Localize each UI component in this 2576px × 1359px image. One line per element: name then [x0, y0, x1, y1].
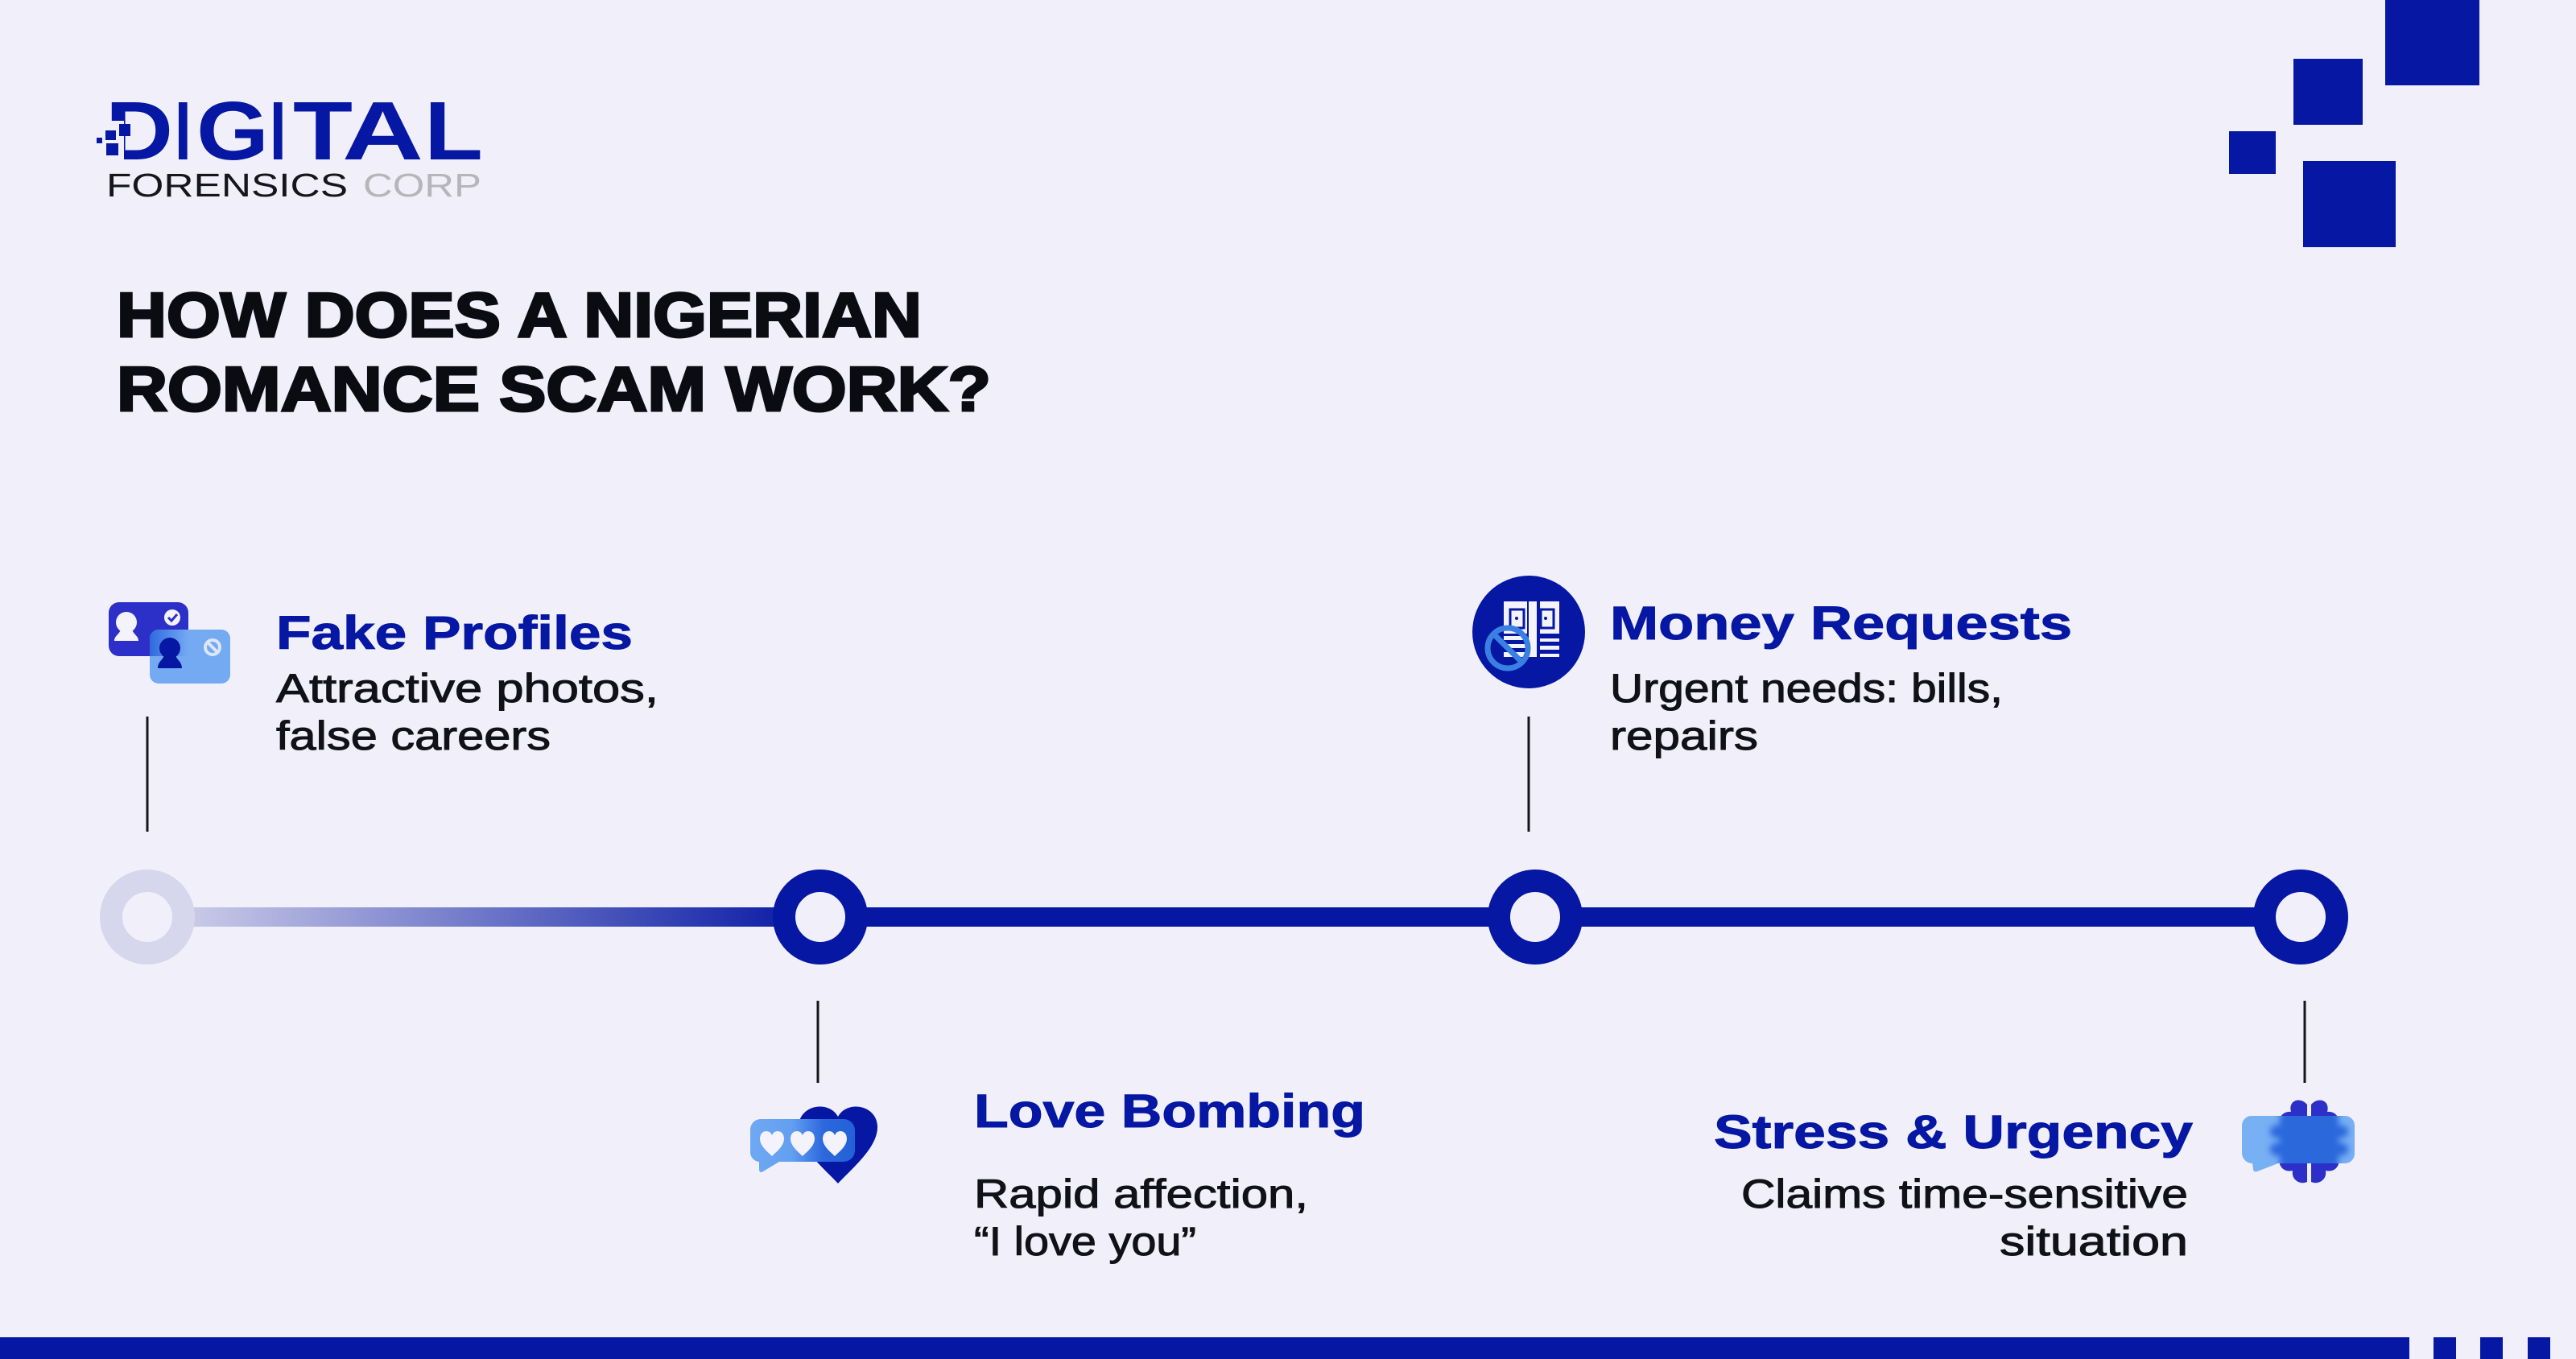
bottom bar — [0, 1337, 2550, 1359]
logo: Digital Forensics Corp — [97, 85, 483, 204]
step: Stress & Urgency — [1714, 1100, 2355, 1264]
logo: Digital Forensics Corp: L — [424, 85, 483, 177]
icon: heart and chat bubble — [750, 1106, 877, 1183]
heading: Stress & Urgency — [1714, 1106, 2193, 1159]
timeline node 1 — [111, 881, 184, 953]
description — [974, 1171, 1308, 1264]
title: ROMANCE SCAM WORK? — [117, 353, 991, 424]
heading: Love Bombing — [974, 1085, 1365, 1138]
logo: Digital Forensics Corp: I — [270, 85, 287, 178]
description: “I love you” — [974, 1219, 1196, 1264]
description — [276, 666, 658, 758]
description — [1741, 1171, 2188, 1264]
step: Fake Profiles — [109, 602, 658, 758]
logo: Digital Forensics Corp: FORENSICS — [106, 167, 348, 204]
logo: Digital Forensics Corp: I — [175, 85, 192, 178]
step: Money Requests — [1472, 576, 2072, 758]
decorative squares top right — [2229, 0, 2479, 247]
heading: Fake Profiles — [276, 607, 633, 659]
heading: Money Requests — [1610, 597, 2072, 650]
timeline — [111, 881, 2337, 953]
title — [117, 279, 991, 424]
step: Love Bombing — [750, 1085, 1365, 1264]
logo: Digital Forensics Corp: A — [342, 85, 423, 177]
description — [1610, 666, 2003, 758]
title: HOW DOES A NIGERIAN — [117, 279, 922, 350]
description: Rapid affection, — [974, 1171, 1308, 1216]
description: situation — [2000, 1219, 2188, 1264]
timeline node 2 — [784, 881, 857, 953]
logo: Digital Forensics Corp: CORP — [363, 167, 481, 204]
logo: Digital Forensics Corp: G — [196, 85, 269, 177]
icon: brain and chat bubble — [2242, 1100, 2355, 1183]
icon: ID cards — [109, 602, 230, 684]
description: Claims time-sensitive — [1741, 1171, 2188, 1216]
description: Attractive photos, — [276, 666, 658, 711]
timeline node 3 — [1499, 881, 1571, 953]
connector stems — [147, 717, 2305, 1083]
description: false careers — [276, 713, 551, 758]
icon: banknotes with prohibition sign — [1472, 576, 1585, 688]
description: Urgent needs: bills, — [1610, 666, 2003, 711]
description: repairs — [1610, 713, 1758, 758]
logo: Digital Forensics Corp: D — [105, 85, 173, 177]
timeline node 4 — [2264, 881, 2337, 953]
logo: Digital Forensics Corp: T — [293, 85, 353, 177]
